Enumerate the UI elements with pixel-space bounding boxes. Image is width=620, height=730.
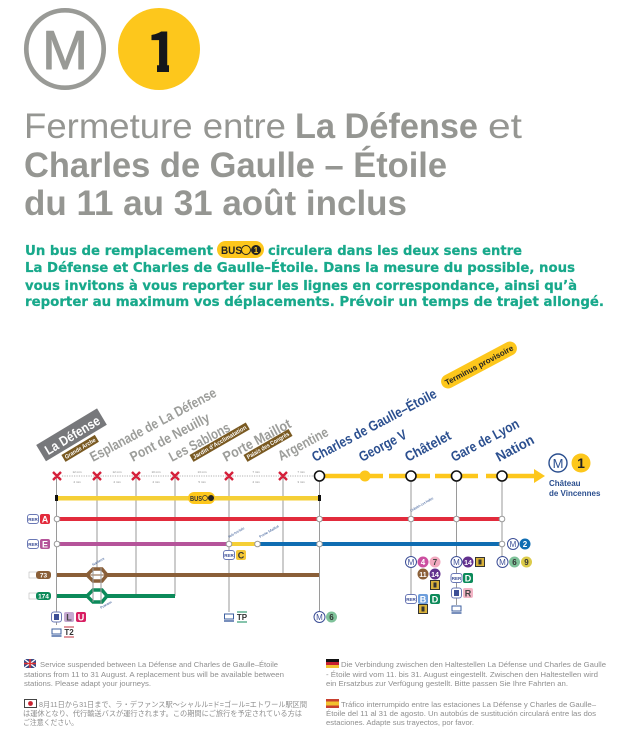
- icon: bus badge: BUS: [221, 245, 242, 257]
- walking time strip: 4 min: [113, 480, 121, 484]
- terminus: Chateau de Vincennes: [549, 454, 601, 498]
- connections: Nation: 9: [524, 558, 529, 567]
- connector lines: [56, 476, 502, 625]
- notice: German: [326, 659, 606, 688]
- connections: La Defense: U: [78, 612, 84, 622]
- station labels: closed section: Argentine: [275, 424, 331, 464]
- walking time strip: 13 min: [197, 470, 207, 474]
- title: [24, 107, 522, 223]
- intro text: [25, 241, 604, 310]
- pill: Terminus provisoire: Terminus provisoire: [443, 343, 516, 387]
- station labels: closed section: [36, 384, 331, 465]
- RER E line: C: [238, 550, 245, 560]
- icon: Japan flag: [24, 700, 36, 708]
- RER A line: Châtelet–Les Halles: [410, 496, 434, 513]
- icon: bus pill: [188, 492, 215, 504]
- connections: La Defense: [52, 612, 86, 637]
- brown rail line 73: Nanterre: [92, 557, 105, 567]
- intro text: La Défense et Charles de Gaulle–Étoile. Dans la mesure du possible, nous: [25, 259, 575, 276]
- walking time strip: [62, 470, 314, 484]
- notice: English: [24, 659, 284, 688]
- icon: Spanish flag: [326, 699, 339, 708]
- connections: Porte Maillot: TP: [237, 613, 248, 622]
- tag: Palais des Congres: Palais des Congrès: [246, 431, 291, 461]
- station labels: closed section: Esplanade de La Défense: [87, 384, 219, 465]
- connections: Chatelet: B: [420, 594, 427, 604]
- walking time strip: 12 min: [72, 470, 82, 474]
- title: du 11 au 31 août inclus: [24, 184, 407, 223]
- notice: Japanese: ご注意ください。: [23, 718, 78, 727]
- walking time strip: 3 min: [297, 480, 305, 484]
- notice: Japanese: 8月11日から31日まで、ラ・デファンス駅〜シャルル=ド=ゴール=エトワール駅区間: [39, 700, 307, 709]
- icon: bus badge: [217, 241, 264, 258]
- notice: German: Die Verbindung zwischen den Haltestellen La Défense und Charles de Gaulle: [341, 660, 606, 669]
- notice: English: Service suspended between La Défense and Charles de Gaulle–Étoile: [40, 660, 278, 669]
- title: et: [488, 107, 522, 146]
- icon: line 1 yellow roundel: [118, 8, 200, 90]
- connections: Nation: 6: [512, 558, 517, 567]
- tag: Grande Arche: Grande Arche: [64, 437, 98, 461]
- station labels: closed section: Porte Maillot: [220, 415, 294, 465]
- notice: Spanish: estaciones. Adapte sus trayectos, por favor.: [326, 718, 474, 727]
- notice: English: stations. Please adapt your journeys.: [24, 679, 151, 688]
- walking time strip: 4 min: [152, 480, 160, 484]
- line 1 open section with arrow: [314, 469, 545, 483]
- icon: metro M roundel: [26, 10, 104, 88]
- station labels: open section: Charles de Gaulle–Étoile: [309, 385, 439, 465]
- connections: Charles de Gaulle-Etoile: [314, 612, 337, 622]
- station labels: closed section: Les Sablons: [166, 419, 233, 465]
- walking time strip: 4 min: [73, 480, 81, 484]
- connections: Charles de Gaulle-Etoile: 6: [329, 613, 334, 622]
- connections: Gare de Lyon: R: [465, 588, 472, 598]
- intro text: circulera dans les deux sens entre: [268, 243, 522, 259]
- brown rail line 73: 73: [40, 572, 47, 580]
- notice: Japanese: [23, 700, 307, 727]
- notice: English: stations from 11 to 31 August. A replacement bus will be available between: [24, 670, 284, 679]
- terminus: Chateau de Vincennes: 1: [577, 455, 585, 471]
- connections: Nation: [497, 538, 532, 568]
- terminus: Chateau de Vincennes: Château: [549, 479, 581, 488]
- walking time strip: 12 min: [112, 470, 122, 474]
- icon: metro M roundel: M: [42, 19, 88, 81]
- intro text: Un bus de remplacement: [25, 243, 214, 259]
- connections: Chatelet: 11: [419, 572, 427, 579]
- title: Charles de Gaulle – Étoile: [24, 145, 447, 185]
- station labels: open section: [309, 339, 537, 465]
- notice: Spanish: [326, 699, 597, 727]
- Esplanade tram interchange: [93, 568, 101, 604]
- connections: Gare de Lyon: 14: [464, 560, 472, 567]
- RER A line: [28, 496, 505, 524]
- connections: Chatelet: D: [432, 594, 439, 604]
- station labels: open section: George V: [356, 426, 410, 465]
- intro text: vous invitons à vous reporter sur les lignes en correspondance, ainsi qu’à: [25, 278, 577, 294]
- notice: German: ein Ersatzbus zur Verfügung gestellt. Bitte passen Sie Ihre Fahrten an.: [326, 679, 568, 688]
- green rail line 174: [29, 590, 175, 610]
- RER E line: Porte Maillot: [258, 524, 280, 539]
- connections: Chatelet: [406, 556, 440, 614]
- notice: Japanese: は運休となり、代行輸送バスが運行されます。この期間にご旅行を予定されている方は: [23, 709, 303, 718]
- connections: La Defense: T2: [64, 628, 74, 637]
- notice: German: - Étoile wird vom 11. bis 31. August eingestellt. Zwischen den Haltestellen wird: [326, 670, 598, 679]
- walking time strip: 7 min: [297, 470, 305, 474]
- terminus: Chateau de Vincennes: de Vincennes: [549, 489, 601, 498]
- label: La Défense: La Défense: [42, 413, 103, 458]
- connections: Gare de Lyon: [451, 556, 484, 613]
- icon: line 1 yellow roundel: 1: [145, 8, 179, 89]
- notice: Spanish: Tráfico interrumpido entre las estaciones La Défense y Charles de Gaulle–: [341, 700, 597, 709]
- walking time strip: 10 min: [151, 470, 161, 474]
- RER E line: E: [42, 540, 48, 550]
- intro text: reporter au maximum vos déplacements. Prévoir un temps de trajet allongé.: [25, 294, 604, 310]
- walking time strip: 7 min: [252, 470, 260, 474]
- notice: Spanish: Étoile del 11 al 31 de agosto. Un autobús de sustitución circulará entre las dos: [326, 709, 596, 718]
- closed station crosses: [53, 472, 287, 480]
- RER E line: [28, 524, 505, 560]
- connections: Gare de Lyon: D: [465, 574, 472, 584]
- green rail line 174: 174: [38, 594, 49, 600]
- title: Fermeture entre: [24, 107, 286, 146]
- tag: Jardin d'Acclimatation: Jardin d’Acclimatation: [192, 425, 248, 461]
- icon: bus badge: 1: [254, 246, 259, 255]
- icon: German flag: [326, 659, 339, 668]
- walking time strip: 5 min: [198, 480, 206, 484]
- walking time strip: 4 min: [252, 480, 260, 484]
- station labels: closed section: Pont de Neuilly: [127, 409, 212, 465]
- icon: bus pill: BUS: [190, 494, 202, 503]
- station labels: open section: Nation: [493, 431, 537, 465]
- station labels: open section: Châtelet: [402, 427, 454, 465]
- green rail line 174: Puteaux: [100, 600, 113, 610]
- connections: Porte Maillot: [224, 612, 248, 622]
- station labels: open section: Gare de Lyon: [448, 415, 522, 465]
- connections: Chatelet: 4: [421, 558, 426, 567]
- connections: Chatelet: 7: [433, 558, 438, 567]
- connections: Chatelet: 14: [431, 572, 439, 579]
- connections: Nation: 2: [523, 540, 528, 549]
- terminus: Chateau de Vincennes: M: [553, 456, 563, 471]
- title: La Défense: [295, 107, 478, 146]
- RER A line: A: [42, 514, 49, 524]
- brown rail line 73: [29, 557, 319, 581]
- RER E line: Neuilly–Porte Maillot: [228, 526, 245, 539]
- connections: La Defense: L: [66, 612, 72, 622]
- replacement bus line: [55, 492, 321, 504]
- icon: UK flag: [24, 659, 36, 668]
